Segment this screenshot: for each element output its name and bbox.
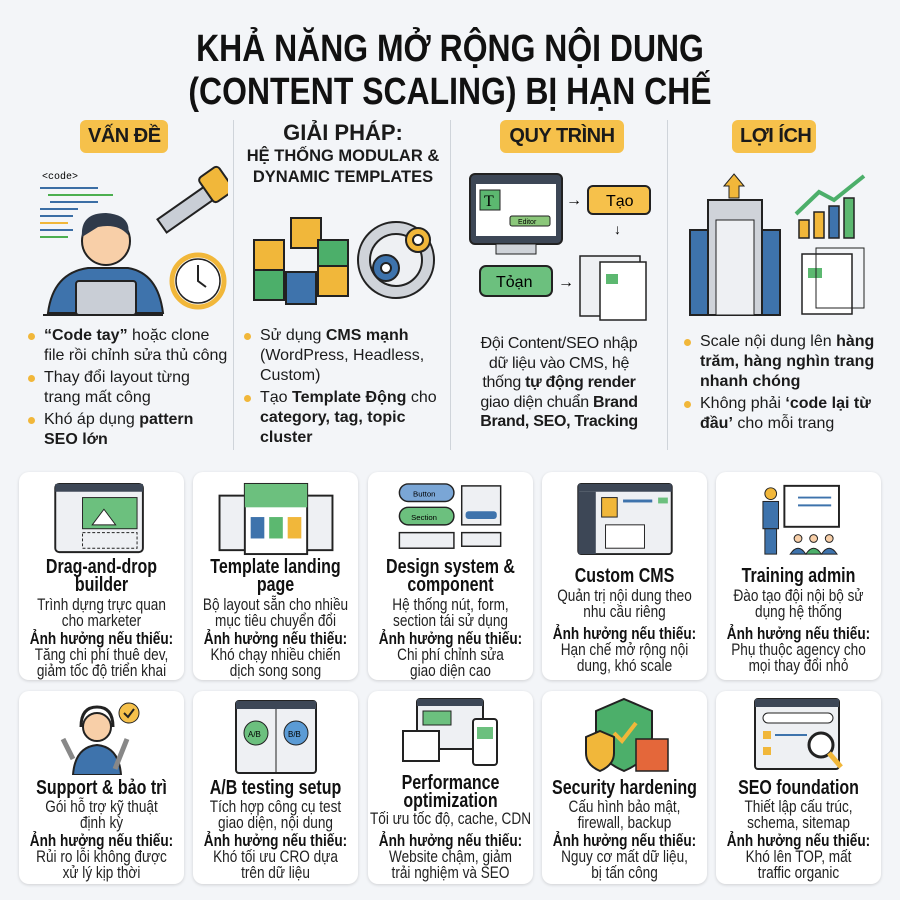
icon: stressed coder bbox=[40, 166, 228, 316]
icon: cms workflow: Tỏạn bbox=[496, 274, 532, 291]
text: template landing: Khó chạy nhiều chiến bbox=[210, 645, 341, 664]
text: security: Cấu hình bảo mật, bbox=[569, 797, 680, 816]
heading: giai phap bbox=[247, 120, 439, 186]
card: template landing page bbox=[193, 472, 358, 680]
heading: van de: VẤN ĐỀ bbox=[88, 125, 161, 147]
bullets: giai phap: Sử dụng CMS mạnh (WordPress, Headless, Custom) bbox=[260, 327, 424, 384]
bullets: loi ich bbox=[684, 333, 874, 432]
text: ab testing: Khó tối ưu CRO dựa bbox=[213, 847, 338, 866]
text: drag-and-drop: builder bbox=[75, 574, 128, 596]
heading: giai phap: DYNAMIC TEMPLATES bbox=[253, 168, 433, 186]
text: quy trinh: Đội Content/SEO nhập bbox=[481, 335, 637, 352]
heading: loi ich bbox=[732, 120, 816, 153]
text: design system: section tái sử dụng bbox=[393, 611, 508, 630]
text: drag-and-drop: cho marketer bbox=[62, 611, 141, 630]
text: design system: Hệ thống nút, form, bbox=[392, 595, 509, 614]
icon: cms workflow: → bbox=[558, 274, 574, 291]
text: ab testing: trên dữ liệu bbox=[241, 863, 310, 882]
text: ab testing: A/B testing setup bbox=[210, 777, 341, 799]
text: quy trinh: Brand, SEO, Tracking bbox=[480, 413, 638, 430]
icon: cms workflow: Editor bbox=[518, 219, 537, 226]
text: performance: optimization bbox=[403, 790, 498, 812]
icon: ui components: Button bbox=[413, 490, 435, 499]
icon: shield and firewall bbox=[585, 698, 669, 772]
text: template landing: Bộ layout sẵn cho nhiều bbox=[203, 595, 348, 614]
text: template landing: Template landing bbox=[210, 556, 341, 578]
text: template landing: page bbox=[257, 574, 294, 596]
bullets: loi ich: Không phải ‘code lại từ đầu’ cho mỗi trang bbox=[700, 395, 871, 432]
text: drag-and-drop: giảm tốc độ triển khai bbox=[37, 661, 166, 680]
text: custom cms: nhu cầu riêng bbox=[583, 602, 666, 621]
text: design system: Ảnh hưởng nếu thiếu: bbox=[379, 629, 522, 648]
text: security bbox=[552, 777, 697, 882]
text: ab testing: giao diện, nội dung bbox=[218, 813, 333, 832]
text: ab testing bbox=[204, 777, 347, 882]
text: seo foundation: SEO foundation bbox=[738, 777, 859, 799]
icon: search window bbox=[754, 698, 843, 770]
card: ab testing bbox=[193, 691, 358, 884]
panel: giai phap bbox=[244, 120, 439, 446]
text: support: định kỳ bbox=[80, 813, 123, 832]
text: seo foundation: schema, sitemap bbox=[747, 813, 850, 832]
text: performance: Website chậm, giảm bbox=[389, 847, 512, 866]
bullets: van de: Khó áp dụng pattern SEO lớn bbox=[44, 411, 193, 448]
heading: van de bbox=[80, 120, 168, 153]
text: drag-and-drop: Ảnh hưởng nếu thiếu: bbox=[30, 629, 173, 648]
title: KHẢ NĂNG MỞ RỘNG NỘI DUNG bbox=[196, 28, 704, 70]
bullets: van de: Thay đổi layout từng trang mất công bbox=[44, 369, 190, 406]
text: drag-and-drop: Drag-and-drop bbox=[46, 556, 157, 578]
text: custom cms: Custom CMS bbox=[575, 565, 674, 587]
icon: trainer and audience bbox=[762, 484, 840, 555]
text: ab testing: Ảnh hưởng nếu thiếu: bbox=[204, 831, 347, 850]
bullets: van de bbox=[28, 327, 227, 448]
heading: quy trinh bbox=[500, 120, 624, 153]
text: quy trinh: thống tự động render bbox=[482, 374, 636, 391]
icon: cms workflow: Tạo bbox=[606, 193, 634, 210]
icon: builder window bbox=[54, 483, 144, 554]
icon: elevator building and growth chart bbox=[689, 173, 866, 316]
bullets: loi ich: Scale nội dung lên hàng trăm, hàng nghìn trang nhanh chóng bbox=[700, 333, 874, 390]
bullets: van de: “Code tay” hoặc clone file rồi chỉnh sửa thủ công bbox=[44, 327, 227, 364]
icon: support agent bbox=[60, 702, 140, 775]
text: support: Rủi ro lỗi không được bbox=[36, 847, 167, 866]
text: support: Support & bảo trì bbox=[36, 777, 167, 799]
icon: ab test window: B/B bbox=[288, 730, 300, 739]
text: custom cms bbox=[553, 565, 696, 675]
icon: ab test window: A/B bbox=[248, 730, 260, 739]
text: training admin: Đào tạo đội nội bộ sử bbox=[733, 586, 864, 605]
panel: loi ich bbox=[684, 120, 874, 432]
text: template landing: Ảnh hưởng nếu thiếu: bbox=[204, 629, 347, 648]
title bbox=[188, 27, 712, 113]
text: quy trinh: giao diện chuẩn Brand bbox=[480, 394, 638, 410]
icon: stressed coder: <code> bbox=[42, 171, 78, 183]
bullets: giai phap bbox=[244, 327, 437, 446]
icon: cms workflow: T bbox=[484, 193, 494, 210]
text: security: Ảnh hưởng nếu thiếu: bbox=[553, 831, 696, 850]
card: security bbox=[542, 691, 707, 884]
text: security: Security hardening bbox=[552, 777, 697, 799]
text: training admin: mọi thay đổi nhỏ bbox=[749, 656, 848, 675]
text: security: firewall, backup bbox=[578, 813, 671, 832]
text: template landing: dịch song song bbox=[230, 661, 321, 680]
text: seo foundation bbox=[727, 777, 870, 882]
card: drag-and-drop builder bbox=[19, 472, 184, 680]
text: seo foundation: Khó lên TOP, mất bbox=[746, 847, 851, 866]
text: design system: giao diện cao bbox=[410, 661, 491, 680]
text: performance: Tối ưu tốc độ, cache, CDN bbox=[370, 809, 531, 828]
text: seo foundation: traffic organic bbox=[758, 863, 839, 882]
icon: cms workflow bbox=[469, 173, 651, 321]
heading: loi ich: LỢI ÍCH bbox=[740, 125, 811, 147]
card: design system bbox=[368, 472, 533, 680]
heading: giai phap: GIẢI PHÁP: bbox=[283, 120, 403, 145]
title: (CONTENT SCALING) BỊ HẠN CHẾ bbox=[188, 71, 712, 113]
card: seo foundation bbox=[716, 691, 881, 884]
text: template landing bbox=[203, 556, 348, 680]
column dividers bbox=[233, 120, 234, 450]
icon: cms dashboard bbox=[577, 483, 673, 555]
text: custom cms: Quản trị nội dung theo bbox=[557, 586, 692, 605]
heading: quy trinh: QUY TRÌNH bbox=[509, 125, 615, 147]
text: design system: component bbox=[407, 574, 494, 596]
text: drag-and-drop bbox=[30, 556, 173, 680]
text: performance: Ảnh hưởng nếu thiếu: bbox=[379, 831, 522, 850]
icon: cubes and gears bbox=[253, 217, 435, 305]
text: seo foundation: Ảnh hưởng nếu thiếu: bbox=[727, 831, 870, 850]
text: design system: Design system & bbox=[386, 556, 515, 578]
text: custom cms: Hạn chế mở rộng nội bbox=[561, 640, 688, 659]
icon: ab test window bbox=[235, 700, 317, 774]
text: support: Ảnh hưởng nếu thiếu: bbox=[30, 831, 173, 850]
icon: ui components: Section bbox=[411, 513, 436, 522]
text: drag-and-drop: Tăng chi phí thuê dev, bbox=[35, 645, 168, 664]
text: quy trinh: dữ liệu vào CMS, hệ bbox=[489, 354, 629, 372]
icon: cms workflow: → bbox=[566, 192, 582, 209]
text: design system bbox=[379, 556, 522, 680]
text: performance: Performance bbox=[402, 772, 499, 794]
text: training admin: Phụ thuộc agency cho bbox=[731, 640, 866, 659]
text: template landing: mục tiêu chuyển đổi bbox=[215, 611, 336, 630]
icon: ui components bbox=[398, 483, 502, 549]
text: training admin bbox=[727, 565, 870, 675]
text: training admin: dụng hệ thống bbox=[755, 602, 842, 621]
text: training admin: Ảnh hưởng nếu thiếu: bbox=[727, 624, 870, 643]
text: quy trinh bbox=[480, 335, 638, 430]
heading: giai phap: HỆ THỐNG MODULAR & bbox=[247, 147, 439, 165]
text: seo foundation: Thiết lập cấu trúc, bbox=[744, 797, 853, 816]
text: ab testing: Tích hợp công cụ test bbox=[210, 797, 341, 816]
card: training admin bbox=[716, 472, 881, 680]
text: security: Nguy cơ mất dữ liệu, bbox=[561, 847, 688, 866]
text: custom cms: dung, khó scale bbox=[577, 656, 672, 675]
text: support: Gói hỗ trợ kỹ thuật bbox=[45, 797, 158, 816]
text: training admin: Training admin bbox=[742, 565, 855, 587]
card: custom cms bbox=[542, 472, 707, 680]
panel: quy trinh bbox=[469, 120, 651, 430]
icon: devices bbox=[402, 698, 498, 766]
bullets: giai phap: Tạo Template Động cho category, tag, topic cluster bbox=[260, 389, 437, 446]
text: design system: Chi phí chỉnh sửa bbox=[397, 645, 504, 664]
text: security: bị tấn công bbox=[591, 863, 658, 882]
panel: van de bbox=[28, 120, 228, 448]
text: custom cms: Ảnh hưởng nếu thiếu: bbox=[553, 624, 696, 643]
text: performance bbox=[370, 772, 531, 882]
card: support bbox=[19, 691, 184, 884]
text: support: xử lý kịp thời bbox=[63, 863, 140, 882]
text: drag-and-drop: Trình dựng trực quan bbox=[37, 595, 166, 614]
icon: layout templates bbox=[218, 482, 334, 556]
text: performance: trải nghiệm và SEO bbox=[392, 863, 509, 882]
icon: cms workflow: ↓ bbox=[614, 221, 621, 237]
text: support bbox=[30, 777, 173, 882]
card: performance bbox=[368, 691, 533, 884]
